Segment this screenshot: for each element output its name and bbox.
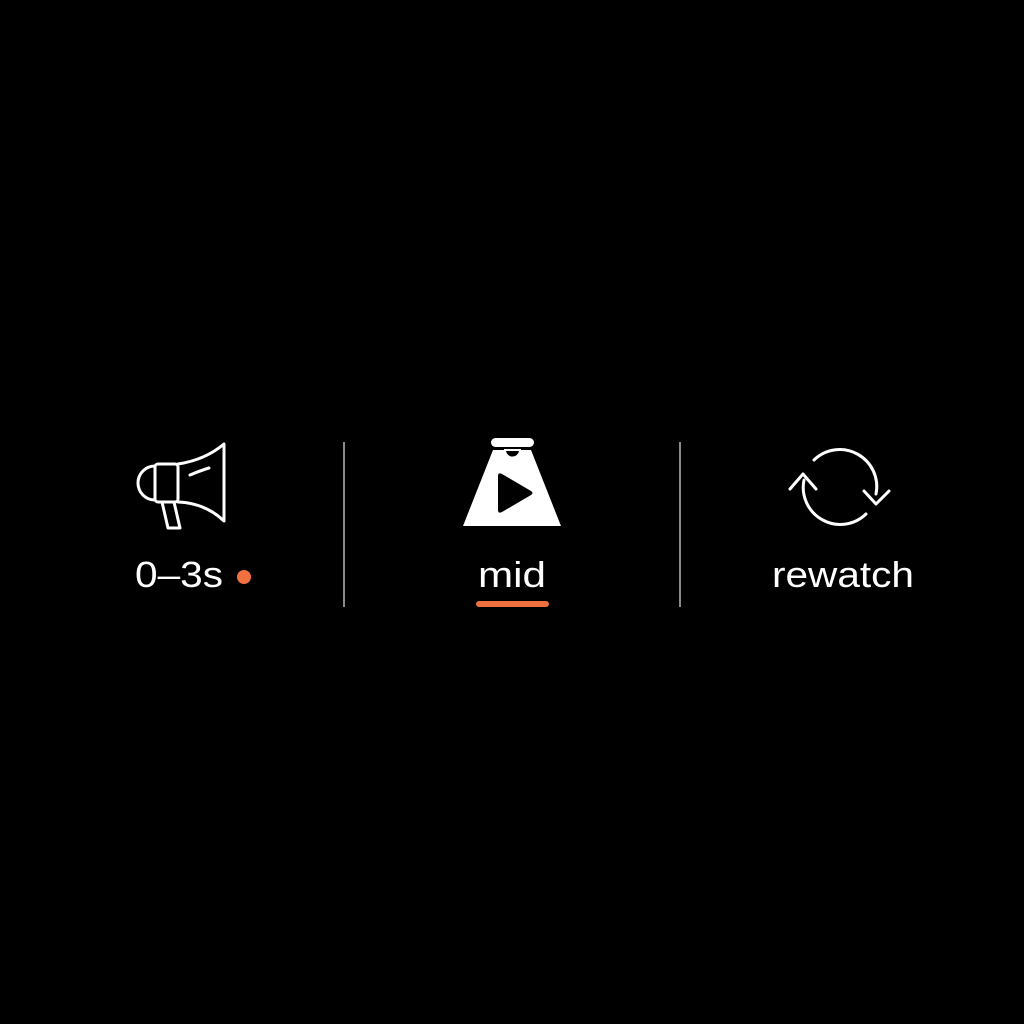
dot (237, 570, 251, 584)
panel: mid (463, 438, 561, 607)
label: 0–3s: 0–3s (135, 554, 223, 595)
label: rewatch: rewatch (772, 554, 914, 595)
icon: refresh arrows (790, 450, 889, 524)
label: mid: mid (478, 554, 546, 595)
icon: megaphone (138, 444, 224, 528)
icon: lamp with play (463, 438, 561, 526)
underline (476, 601, 549, 607)
panel: 0-3s (135, 444, 251, 595)
panel: rewatch (772, 450, 914, 595)
